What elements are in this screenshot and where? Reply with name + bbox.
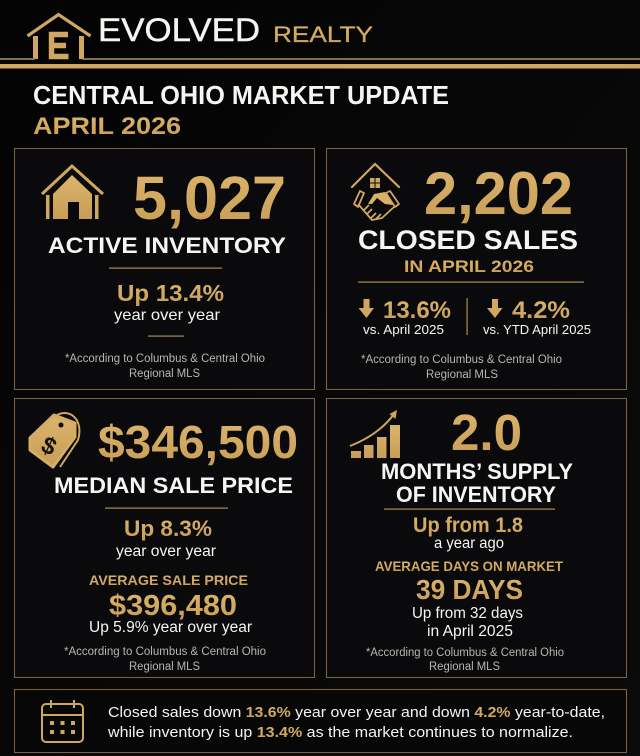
change: Up 8.3%: [124, 516, 212, 541]
source note: [366, 647, 564, 673]
source note: *According to Columbus & Central Ohio: [64, 646, 266, 658]
summary text: while inventory is up 13.4% as the market continues to normalize.: [107, 724, 573, 741]
stat: 2,202: 2,202: [424, 160, 573, 227]
average days on market: in April 2025: [427, 623, 513, 640]
change: Up 13.4%: [117, 280, 224, 306]
stat: YTD change: 4.2%: [512, 297, 570, 324]
source note: *According to Columbus & Central Ohio: [65, 353, 265, 365]
heading: MEDIAN SALE PRICE: [54, 473, 293, 498]
icon: house handshake: [352, 164, 399, 220]
average sale price: Up 5.9% year over year: [89, 619, 252, 636]
heading: CLOSED SALES: [358, 225, 578, 255]
panel: months of supply: [326, 398, 626, 678]
logo wordmark: REALTY: [273, 22, 373, 47]
heading: ACTIVE INVENTORY: [48, 233, 286, 258]
average sale price: $396,480: [109, 590, 237, 622]
panel: summary footer: [14, 690, 626, 752]
panel: closed sales: [326, 148, 626, 390]
change: Up from 1.8: [413, 514, 523, 537]
heading: MONTHS’ SUPPLY: [381, 459, 573, 484]
source note: [361, 354, 562, 381]
stat: YTD change: [483, 297, 591, 337]
panel: median sale price: year over year: [116, 543, 216, 560]
logo wordmark: [98, 12, 373, 48]
icon: logo house: [0, 14, 640, 59]
title: [33, 80, 449, 140]
average days on market: [375, 558, 563, 640]
stat: 2.0: 2.0: [451, 404, 522, 461]
source note: Regional MLS: [129, 368, 200, 380]
average days on market: 39 DAYS: [416, 574, 523, 605]
icon: price tag: [30, 413, 79, 467]
source note: [64, 646, 266, 673]
icon: house: [42, 166, 103, 219]
summary text: [107, 704, 605, 741]
source note: *According to Columbus & Central Ohio: [366, 647, 564, 659]
stat: monthly change: [358, 297, 451, 337]
panel: median sale price: [14, 398, 314, 678]
panel: active inventory: year over year: [114, 307, 221, 324]
panel: active inventory: [14, 148, 314, 390]
stat: 5,027: 5,027: [133, 164, 286, 232]
heading: [381, 459, 573, 507]
average days on market: AVERAGE DAYS ON MARKET: [375, 558, 563, 574]
logo wordmark: EVOLVED: [98, 12, 260, 48]
icon: price tag: $: [37, 431, 61, 462]
average sale price: AVERAGE SALE PRICE: [89, 572, 248, 588]
panel: closed sales: IN APRIL 2026: [404, 257, 534, 276]
panel: months of supply: a year ago: [434, 535, 504, 552]
icon: calendar: [42, 700, 83, 742]
title: APRIL 2026: [33, 113, 181, 140]
stat: $346,500: $346,500: [98, 416, 298, 468]
source note: Regional MLS: [129, 661, 200, 673]
average sale price: [89, 572, 252, 636]
summary text: Closed sales down 13.6% year over year and down 4.2% year-to-date,: [108, 704, 605, 721]
source note: Regional MLS: [426, 369, 498, 381]
average days on market: Up from 32 days: [412, 605, 523, 622]
heading: OF INVENTORY: [396, 482, 556, 507]
stat: monthly change: 13.6%: [383, 297, 451, 324]
source note: *According to Columbus & Central Ohio: [361, 354, 562, 366]
icon: rising bar chart: [350, 410, 400, 458]
stat: YTD change: vs. YTD April 2025: [483, 322, 591, 337]
source note: [65, 353, 265, 380]
title: CENTRAL OHIO MARKET UPDATE: [33, 80, 449, 110]
source note: Regional MLS: [429, 661, 500, 673]
header: Evolved Realty logo: [0, 12, 640, 68]
stat: monthly change: vs. April 2025: [363, 322, 444, 337]
